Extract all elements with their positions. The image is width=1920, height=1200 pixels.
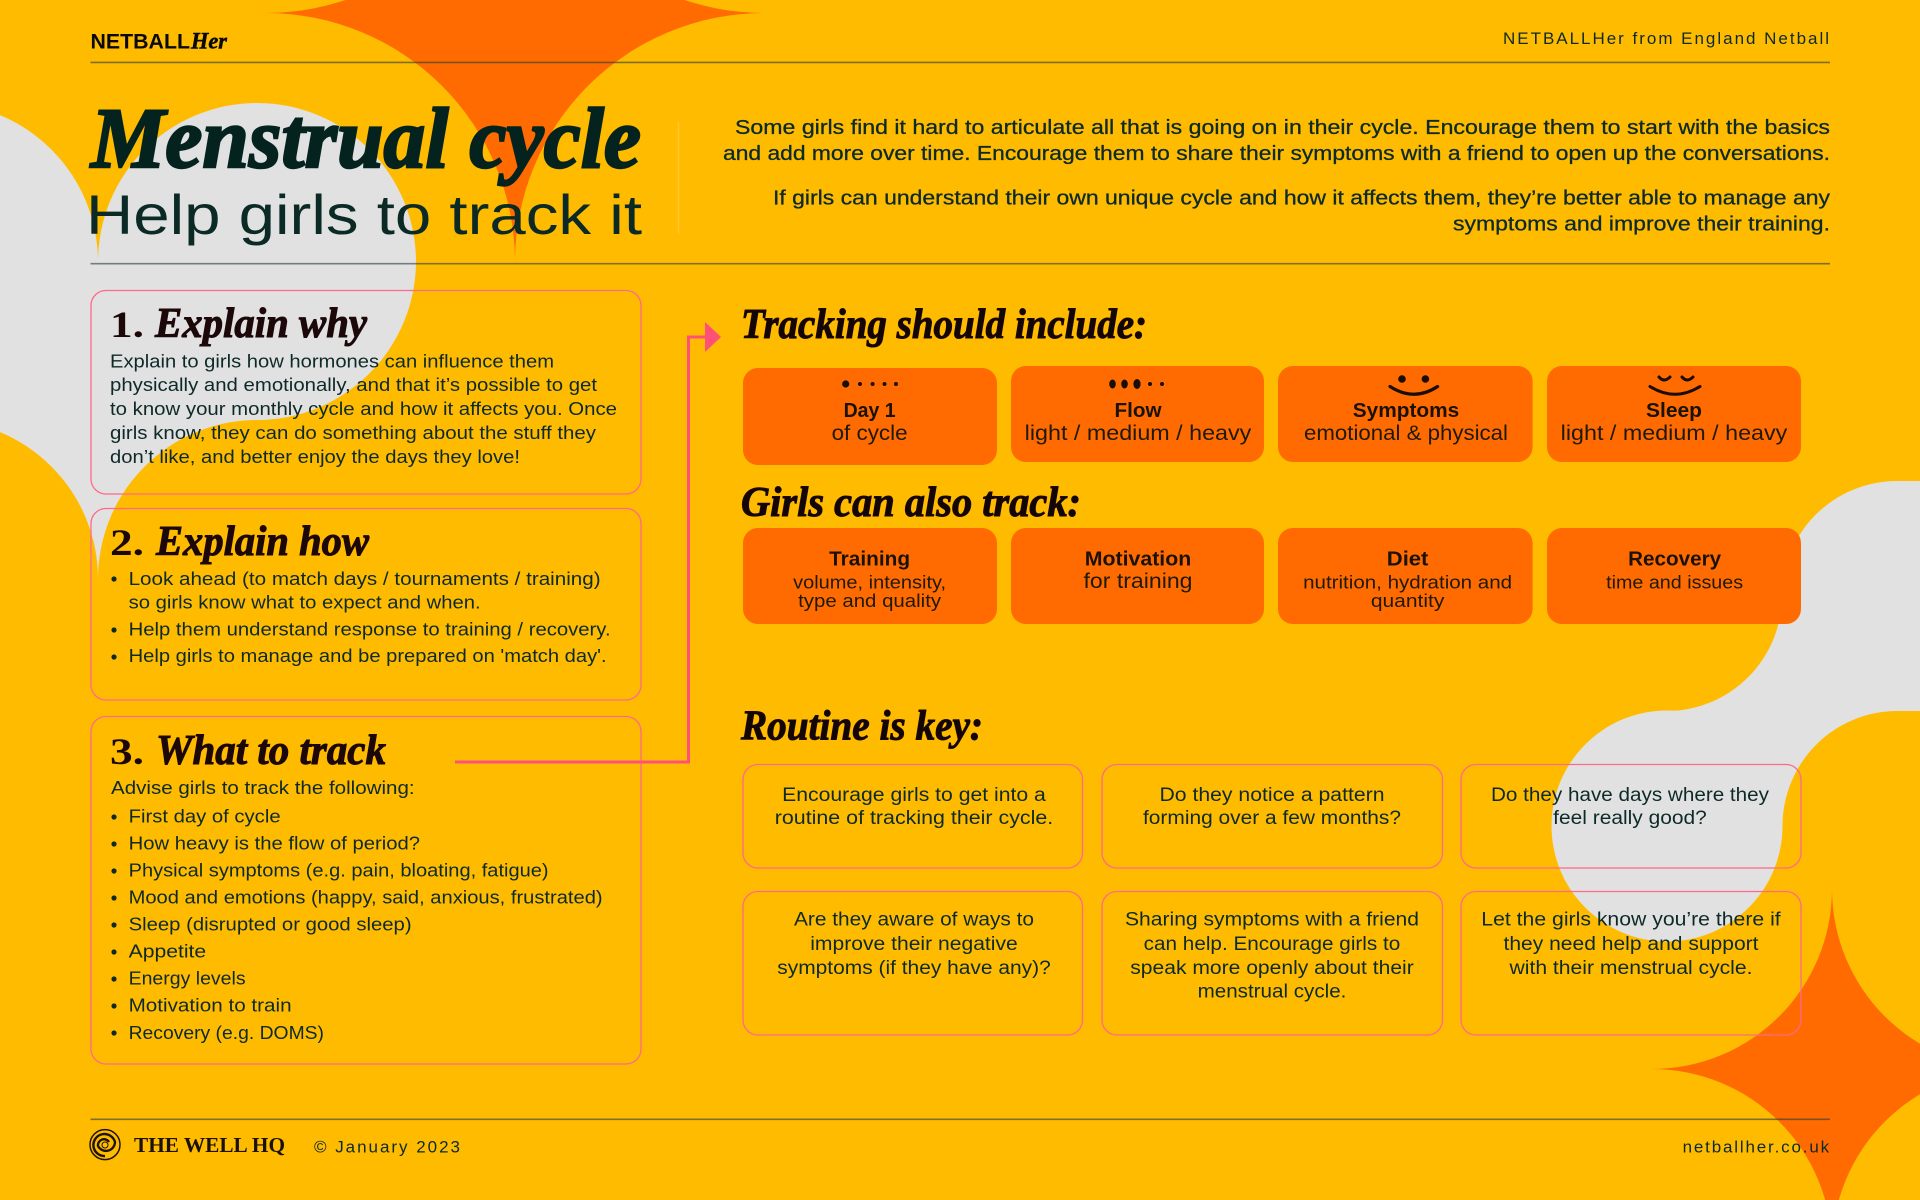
panel: routine card 2: forming over a few months? — [1143, 808, 1401, 829]
title: main: Menstrual cycle — [89, 90, 641, 186]
panel: card Diet: quantity — [1371, 591, 1444, 611]
panel: card Diet: Diet — [1387, 549, 1429, 571]
panel: tracking card Sleep: light / medium / heavy — [1561, 422, 1788, 445]
panel: routine card 3: Do they have days where they — [1491, 785, 1770, 806]
panel: routine card 5: menstrual cycle. — [1198, 982, 1346, 1003]
heading: What to track: 3. — [110, 732, 144, 773]
panel: routine card 6 — [1461, 892, 1801, 1035]
panel: tracking card Symptoms: emotional & physical — [1304, 422, 1508, 445]
list: What to track bullets — [111, 806, 603, 1043]
panel: routine card 5: Sharing symptoms with a friend — [1125, 910, 1419, 931]
panel: card Recovery: Recovery — [1628, 549, 1722, 571]
header logo: Her — [190, 29, 228, 54]
panel: routine card 1: Encourage girls to get into a — [782, 785, 1046, 806]
panel: routine card 6: they need help and support — [1504, 934, 1759, 955]
header strapline: NETBALLHer from England Netball — [1503, 29, 1829, 48]
panel: tracking card Sleep: Sleep — [1646, 400, 1702, 422]
footer logo: The Well HQ — [90, 1130, 285, 1160]
icon: smiling face — [1390, 375, 1438, 394]
panel: routine card 2: Do they notice a pattern — [1160, 785, 1384, 806]
panel: routine card 5 — [1102, 892, 1442, 1035]
heading: Tracking should include: Tracking should include: — [741, 302, 1147, 348]
text: Explain why body: girls know, they can do something about the stuff they — [110, 422, 597, 443]
panel: card Training: Training — [829, 549, 910, 571]
panel: card Training — [743, 528, 997, 624]
panel: tracking card Day 1 — [743, 368, 997, 465]
heading: Explain how: 2. — [110, 523, 144, 564]
background shape: left grey blob — [0, 103, 416, 579]
panel: routine card 4: improve their negative — [810, 934, 1018, 955]
icon: flow drops — [1109, 379, 1164, 389]
list: What to track bullets: How heavy is the flow of period? — [129, 832, 420, 854]
panel: routine card 6: Let the girls know you’re there if — [1481, 910, 1781, 931]
panel: routine card 5: can help. Encourage girls to — [1144, 934, 1400, 955]
list: What to track bullets: Physical symptoms (e.g. pain, bloating, fatigue) — [129, 860, 549, 881]
icon: day dots — [842, 380, 898, 388]
list: What to track bullets: Mood and emotions (happy, said, anxious, frustrated) — [129, 886, 603, 908]
panel: routine card 3 — [1461, 764, 1801, 868]
panel: tracking card Flow — [1011, 366, 1264, 462]
intro text: symptoms and improve their training. — [1453, 214, 1830, 236]
panel: tracking card Day 1: Day 1 — [844, 400, 896, 422]
intro text — [723, 117, 1830, 236]
heading: Girls can also track: Girls can also track: — [741, 480, 1081, 526]
title: subtitle: Help girls to track it — [86, 183, 643, 246]
list: What to track bullets: Recovery (e.g. DOMS) — [129, 1022, 324, 1043]
heading: Explain how: Explain how — [155, 519, 370, 565]
list: Explain how bullets: Help them understand response to training / recovery. — [129, 619, 611, 640]
panel: 1. Explain why — [91, 290, 641, 494]
icon: sleeping face — [1650, 377, 1700, 394]
panel: tracking card Symptoms: Symptoms — [1353, 400, 1459, 422]
footer url: netballher.co.uk — [1683, 1138, 1830, 1156]
footer date: © January 2023 — [314, 1138, 460, 1156]
intro text: If girls can understand their own unique cycle and how it affects them, they’re better able to manage any — [773, 188, 1830, 210]
text: What to track intro: Advise girls to track the following: — [111, 777, 415, 798]
text: Explain why body — [110, 350, 617, 467]
panel: routine card 1 — [743, 764, 1082, 868]
panel: routine card 6: with their menstrual cycle. — [1508, 958, 1752, 979]
panel: card Recovery: time and issues — [1606, 573, 1743, 593]
panel: routine card 4 — [743, 892, 1082, 1035]
list: Explain how bullets: Look ahead (to match days / tournaments / training) — [129, 568, 601, 589]
background shape: top orange star — [266, 0, 764, 262]
arrow: from What to track to Tracking should include — [455, 322, 721, 762]
panel: routine card 4: Are they aware of ways to — [794, 910, 1034, 931]
panel: tracking card Flow: Flow — [1114, 400, 1162, 422]
list: What to track bullets: Energy levels — [129, 968, 246, 989]
panel: card Recovery — [1547, 528, 1801, 624]
intro text: and add more over time. Encourage them to share their symptoms with a friend to open up the conversations. — [723, 143, 1830, 165]
panel: routine card 3: feel really good? — [1553, 808, 1707, 829]
list: What to track bullets: First day of cycle — [129, 806, 281, 827]
panel: routine card 4: symptoms (if they have any)? — [777, 958, 1051, 979]
text: Explain why body: to know your monthly cycle and how it affects you. Once — [110, 398, 617, 419]
panel: 2. Explain how — [91, 508, 641, 700]
heading: What to track: What to track — [156, 728, 386, 774]
title — [86, 90, 643, 246]
intro text: Some girls find it hard to articulate all that is going on in their cycle. Encourage them to start with the basics — [735, 117, 1830, 139]
panel: tracking card Day 1: of cycle — [832, 422, 908, 445]
background shape: bottom orange star — [1652, 889, 1920, 1200]
panel: card Training: type and quality — [798, 591, 941, 611]
panel: 3. What to track — [91, 716, 641, 1064]
text: Explain why body: physically and emotionally, and that it’s possible to get — [110, 374, 597, 395]
panel: card Training: volume, intensity, — [793, 573, 946, 593]
text: Explain why body: Explain to girls how hormones can influence them — [110, 350, 554, 372]
panel: card Motivation — [1011, 528, 1264, 624]
panel: card Diet — [1278, 528, 1533, 624]
panel: tracking card Symptoms — [1278, 366, 1533, 462]
heading: Explain why: Explain why — [154, 301, 367, 347]
panel: tracking card Flow: light / medium / heavy — [1025, 422, 1252, 445]
heading: Explain why: 1. — [110, 305, 144, 346]
list: What to track bullets: Motivation to train — [129, 994, 292, 1015]
panel: routine card 1: routine of tracking their cycle. — [775, 808, 1053, 829]
panel: card Motivation: for training — [1084, 570, 1192, 593]
panel: card Motivation: Motivation — [1085, 549, 1191, 571]
list: What to track bullets: Sleep (disrupted or good sleep) — [129, 914, 412, 935]
panel: routine card 5: speak more openly about their — [1130, 958, 1414, 979]
panel: routine card 2 — [1102, 764, 1442, 868]
list: Explain how bullets — [111, 568, 611, 666]
text: Explain why body: don’t like, and better enjoy the days they love! — [110, 446, 520, 467]
heading: Routine is key: Routine is key: — [740, 704, 983, 750]
panel: card Diet: nutrition, hydration and — [1303, 573, 1512, 593]
icon: spiral — [90, 1130, 120, 1160]
panel: tracking card Sleep — [1547, 366, 1801, 462]
list: Explain how bullets: Help girls to manage and be prepared on 'match day'. — [129, 645, 607, 666]
header logo: NETBALL — [90, 31, 190, 54]
list: What to track bullets: Appetite — [129, 940, 206, 961]
background shape: right grey blob — [1552, 481, 1920, 942]
header logo — [90, 29, 228, 54]
footer logo: The Well HQ: THE WELL HQ — [134, 1133, 285, 1157]
list: Explain how bullets: so girls know what to expect and when. — [129, 592, 481, 612]
